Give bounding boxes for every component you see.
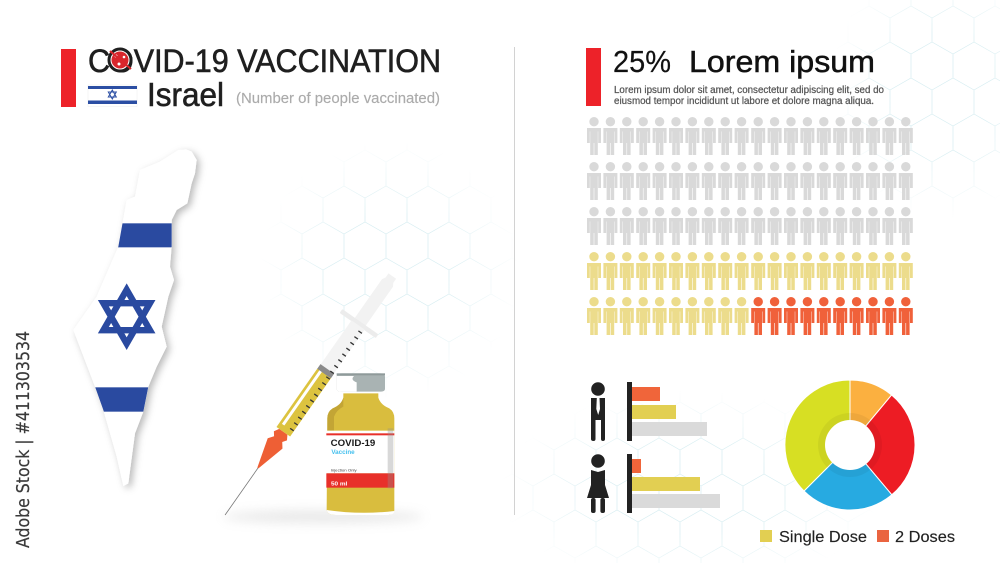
woman grey bar — [632, 494, 720, 508]
pictogram chart: people — [587, 117, 913, 335]
syringe — [207, 263, 410, 528]
man axis — [627, 382, 632, 441]
flag stripes and star — [95, 223, 172, 412]
woman axis — [627, 454, 632, 513]
legend swatch: two doses — [877, 530, 889, 542]
paragraph: eiusmod tempor incididunt ut labore et dolore magna aliqua. — [614, 96, 874, 107]
vaccine illustration — [207, 263, 423, 528]
icon: woman — [587, 454, 609, 513]
label heading: COVID-19 — [331, 438, 375, 448]
legend label: two doses: 2 Doses — [895, 529, 955, 546]
paragraph: Lorem ipsum dolor sit amet, consectetur adipiscing elit, sed do — [614, 85, 884, 96]
legend swatch: single dose — [760, 530, 772, 542]
label subheading: Vaccine — [331, 450, 355, 456]
inner shadow ring — [818, 413, 882, 477]
orange segment — [850, 380, 892, 445]
centre divider — [514, 47, 515, 515]
clear barrel — [318, 320, 365, 378]
row 3 grey — [587, 207, 913, 245]
donut chart — [785, 380, 915, 510]
vial label — [326, 431, 394, 473]
barrel liquid — [276, 368, 331, 436]
map outline — [73, 149, 197, 486]
hexagon background pattern — [275, 0, 1000, 563]
green segment — [785, 380, 850, 491]
bar chart: men and women — [587, 382, 720, 513]
needle hub — [251, 427, 291, 473]
ground shadow — [223, 510, 423, 523]
vaccine vial — [326, 373, 394, 515]
needle — [225, 467, 259, 515]
red segment — [850, 395, 915, 495]
woman orange bar — [632, 459, 641, 473]
legend — [760, 529, 955, 546]
title: COVID-19 VACCINATION — [88, 43, 441, 79]
woman yellow bar — [632, 477, 700, 491]
heading: Lorem ipsum — [689, 44, 875, 79]
flange — [340, 309, 378, 338]
plunger — [354, 272, 398, 326]
man grey bar — [632, 422, 707, 436]
stock id side text: Adobe Stock | #411303534 — [13, 331, 34, 548]
red title bar — [61, 49, 76, 107]
subtitle: (Number of people vaccinated) — [236, 90, 440, 107]
row 2 grey — [587, 162, 913, 200]
row 1 grey — [587, 117, 913, 155]
right heading — [586, 44, 884, 107]
percentage: 25% — [613, 44, 671, 79]
red band — [326, 473, 394, 488]
vial cap — [337, 373, 385, 392]
map: Israel flag map — [74, 148, 204, 490]
row 5 yellow and orange — [587, 297, 913, 335]
donut hole — [825, 420, 875, 470]
icon: virus — [109, 49, 131, 71]
blue segment — [804, 445, 892, 510]
man yellow bar — [632, 405, 676, 419]
red heading bar — [586, 48, 601, 106]
man orange bar — [632, 387, 660, 401]
icon: Israeli flag — [88, 85, 137, 106]
scale ticks — [290, 331, 362, 431]
icon: man — [591, 382, 605, 441]
bottom lip — [327, 510, 394, 515]
glass highlight — [388, 428, 393, 488]
country name: Israel — [147, 76, 224, 113]
rubber stopper — [317, 364, 334, 378]
left heading — [61, 43, 441, 113]
injection note: Injection Only — [331, 469, 357, 473]
row 4 yellow — [587, 252, 913, 290]
legend label: single dose: Single Dose — [779, 529, 867, 546]
volume: 50 ml — [331, 481, 348, 487]
vial body — [327, 393, 394, 515]
